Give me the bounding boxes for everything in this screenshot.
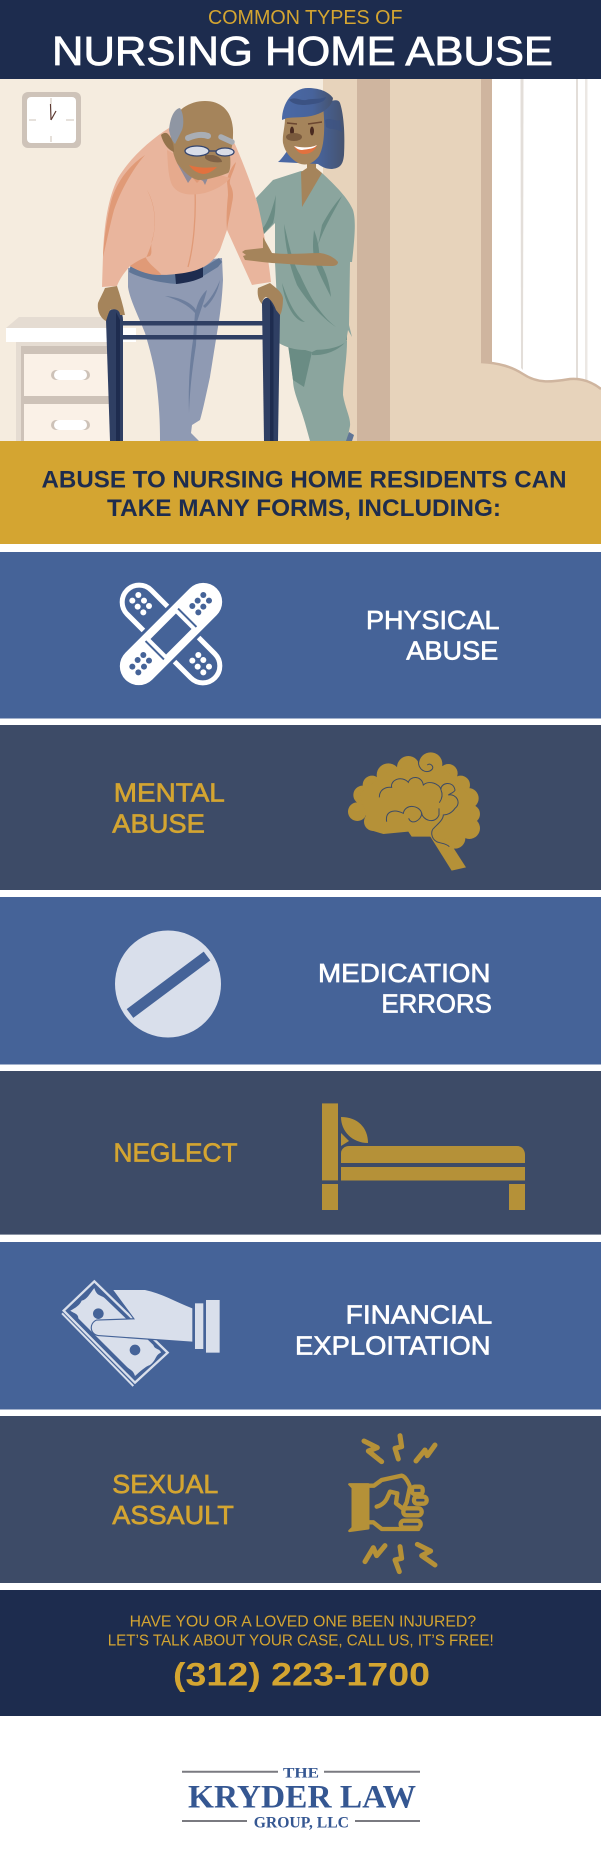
elderly man figure xyxy=(102,101,271,441)
label: SEXUAL xyxy=(112,1469,218,1499)
man belt xyxy=(129,258,222,284)
main title: NURSING HOME ABUSE xyxy=(52,28,553,74)
panel: physical abuse xyxy=(0,552,601,718)
nurse trousers xyxy=(288,341,350,441)
nurse face xyxy=(283,105,324,165)
bedside drawers xyxy=(6,317,136,441)
icon: crossed bandages xyxy=(109,572,233,696)
wall clock xyxy=(22,92,81,148)
label: MEDICATION xyxy=(318,958,490,988)
man head xyxy=(171,101,233,180)
label: MENTAL xyxy=(114,778,225,808)
intro text: ABUSE TO NURSING HOME RESIDENTS CAN xyxy=(42,466,566,494)
nurse figure xyxy=(256,88,355,441)
man collar xyxy=(177,163,208,185)
phone number: (312) 223-1700 xyxy=(173,1657,430,1693)
label: PHYSICAL xyxy=(366,605,500,635)
window and curtain xyxy=(481,79,601,389)
label: FINANCIAL xyxy=(346,1299,492,1329)
law firm logo: GROUP, LLC xyxy=(254,1814,349,1831)
icon: fist with impact bolts xyxy=(349,1436,435,1572)
panel: financial exploitation: EXPLOITATION xyxy=(295,1330,490,1360)
panel: medication errors: ERRORS xyxy=(381,988,492,1018)
man shirt xyxy=(102,128,271,287)
panel: sexual assault xyxy=(0,1416,601,1583)
man trousers xyxy=(128,258,223,441)
icon: pill xyxy=(115,930,221,1038)
man's hands xyxy=(98,283,283,321)
nurse tunic xyxy=(256,171,355,350)
walking frame xyxy=(106,298,280,441)
call to action text: HAVE YOU OR A LOVED ONE BEEN INJURED? xyxy=(130,1614,476,1631)
law firm logo: KRYDER LAW xyxy=(188,1779,416,1815)
label: NEGLECT xyxy=(114,1138,238,1168)
nurse hair fringe xyxy=(282,88,333,120)
illustration: nurse helping elderly man xyxy=(0,79,601,441)
icon: brain xyxy=(348,752,480,871)
call to action banner: LET’S TALK ABOUT YOUR CASE, CALL US, IT’S FREE! xyxy=(108,1633,494,1650)
panel: medication errors xyxy=(0,897,601,1064)
panel: mental abuse xyxy=(0,725,601,890)
panel: physical abuse: ABUSE xyxy=(406,636,498,666)
panel: mental abuse: ABUSE xyxy=(112,809,205,839)
header banner xyxy=(0,0,601,79)
law firm logo: THE xyxy=(283,1765,319,1781)
call to action banner xyxy=(0,1590,601,1716)
gold intro banner: TAKE MANY FORMS, INCLUDING: xyxy=(107,495,501,522)
nurse arm and hand resting on sleeve xyxy=(242,237,338,266)
icon: bed xyxy=(322,1103,525,1210)
panel: sexual assault: ASSAULT xyxy=(112,1500,234,1530)
nurse neck xyxy=(301,156,322,207)
law firm logo xyxy=(182,1765,420,1831)
nurse hair back xyxy=(278,100,344,169)
gold intro banner xyxy=(0,441,601,544)
header kicker: COMMON TYPES OF xyxy=(208,7,402,29)
panel: neglect xyxy=(0,1071,601,1235)
panel: financial exploitation xyxy=(0,1242,601,1410)
icon: hand with money xyxy=(62,1281,220,1386)
